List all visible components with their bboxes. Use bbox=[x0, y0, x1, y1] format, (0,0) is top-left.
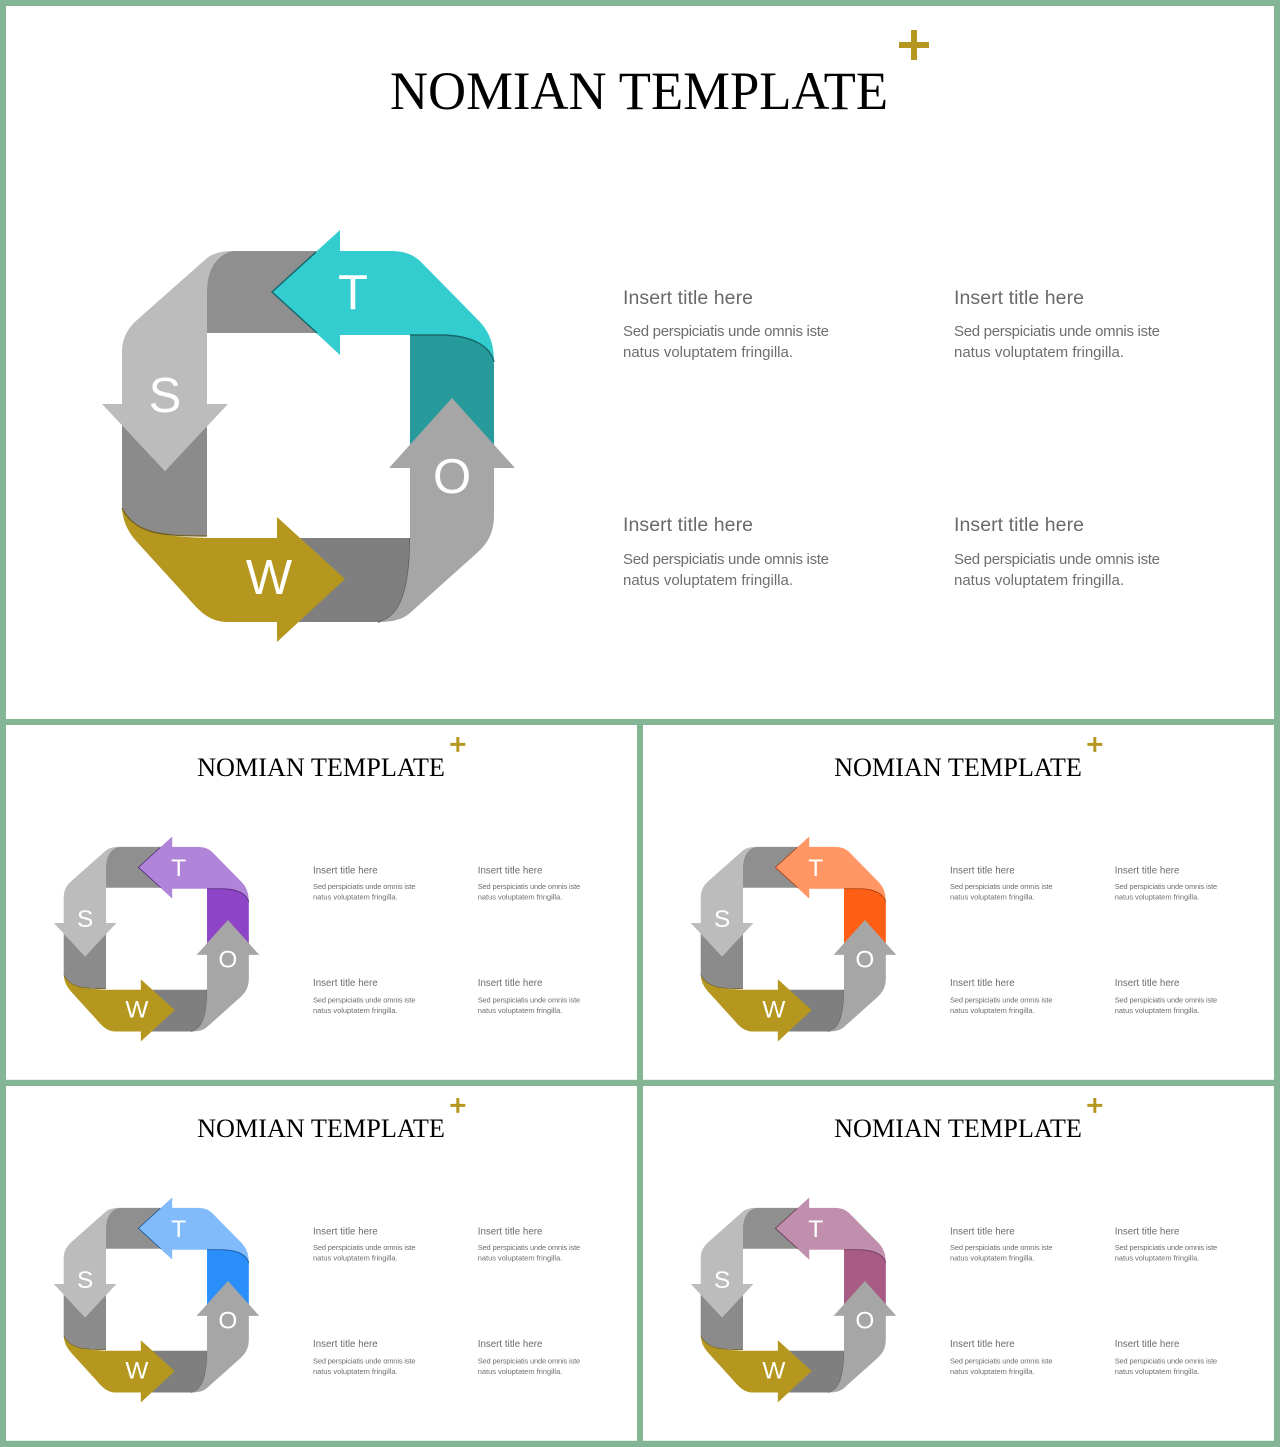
text block 3: natus voluptatem fringilla. bbox=[623, 572, 793, 589]
text block 4: natus voluptatem fringilla. bbox=[1115, 1006, 1199, 1015]
text block 2 bbox=[478, 1226, 580, 1263]
text block 1 bbox=[313, 865, 416, 902]
letter S: S bbox=[77, 906, 93, 933]
letter S: S bbox=[77, 1267, 93, 1294]
text block 4: natus voluptatem fringilla. bbox=[478, 1367, 562, 1376]
arrow: W bbox=[64, 1336, 175, 1402]
letter S: S bbox=[714, 906, 730, 933]
letter T: T bbox=[171, 1216, 186, 1243]
text block 2: Sed perspiciatis unde omnis iste bbox=[478, 882, 580, 891]
text block 4: Insert title here bbox=[954, 514, 1084, 536]
letter O: O bbox=[855, 946, 874, 973]
text block 1 bbox=[950, 865, 1053, 902]
diagram: SWOT cycle bbox=[54, 836, 259, 1041]
text block 2: Sed perspiciatis unde omnis iste bbox=[1115, 882, 1217, 891]
arrow: O bbox=[191, 920, 259, 1032]
letter T: T bbox=[808, 855, 823, 882]
letter O: O bbox=[218, 946, 237, 973]
text block 3: Insert title here bbox=[623, 514, 753, 536]
text block 2: Insert title here bbox=[478, 1226, 542, 1237]
text block 1 bbox=[950, 1226, 1053, 1263]
text block 1: Insert title here bbox=[623, 287, 753, 309]
text block 3: natus voluptatem fringilla. bbox=[313, 1006, 398, 1015]
letter S: S bbox=[149, 369, 181, 423]
title: NOMIAN TEMPLATE bbox=[834, 752, 1082, 782]
icon: gold plus bbox=[1087, 1098, 1102, 1113]
text block 4 bbox=[1115, 978, 1217, 1015]
text block 3: Insert title here bbox=[950, 1339, 1015, 1350]
text block 2: natus voluptatem fringilla. bbox=[1115, 1254, 1199, 1263]
letter O: O bbox=[433, 450, 471, 504]
title: NOMIAN TEMPLATE bbox=[197, 1113, 445, 1143]
text block 2 bbox=[1115, 865, 1217, 902]
text block 3 bbox=[313, 1339, 416, 1376]
text block 2: natus voluptatem fringilla. bbox=[1115, 893, 1199, 902]
text block 1: Insert title here bbox=[950, 865, 1015, 876]
text block 4 bbox=[1115, 1339, 1217, 1376]
letter W: W bbox=[246, 551, 293, 605]
arrow: S bbox=[102, 251, 233, 471]
panel: large SWOT teal bbox=[6, 6, 1274, 719]
letter T: T bbox=[171, 855, 186, 882]
letter O: O bbox=[218, 1307, 237, 1334]
letter S: S bbox=[714, 1267, 730, 1294]
text block 3: natus voluptatem fringilla. bbox=[950, 1006, 1035, 1015]
text block 4: Sed perspiciatis unde omnis iste bbox=[1115, 996, 1217, 1005]
text block 3: Sed perspiciatis unde omnis iste bbox=[313, 996, 416, 1005]
text block 2: Sed perspiciatis unde omnis iste bbox=[954, 323, 1160, 340]
letter W: W bbox=[125, 1358, 148, 1385]
arrow: W bbox=[701, 975, 812, 1041]
text block 2: natus voluptatem fringilla. bbox=[478, 1254, 562, 1263]
letter W: W bbox=[762, 1358, 785, 1385]
text block 4: natus voluptatem fringilla. bbox=[954, 572, 1124, 589]
text block 3: Insert title here bbox=[313, 978, 378, 989]
arrow: S bbox=[691, 847, 756, 956]
text block 1: Insert title here bbox=[313, 865, 378, 876]
text block 2 bbox=[478, 865, 580, 902]
text block 2: Insert title here bbox=[1115, 1226, 1179, 1237]
text block 3: natus voluptatem fringilla. bbox=[313, 1367, 398, 1376]
text block 2 bbox=[954, 287, 1160, 361]
arrow: T bbox=[775, 836, 886, 902]
arrow: T bbox=[272, 230, 494, 362]
text block 1: natus voluptatem fringilla. bbox=[950, 1254, 1035, 1263]
text block 4: Sed perspiciatis unde omnis iste bbox=[954, 551, 1160, 568]
text block 2: Insert title here bbox=[478, 865, 542, 876]
text block 3: Sed perspiciatis unde omnis iste bbox=[950, 1357, 1053, 1366]
arrow: O bbox=[828, 1281, 896, 1393]
text block 1: Sed perspiciatis unde omnis iste bbox=[623, 323, 829, 340]
arrow: S bbox=[54, 847, 119, 956]
text block 2: natus voluptatem fringilla. bbox=[954, 344, 1124, 361]
text block 4: natus voluptatem fringilla. bbox=[478, 1006, 562, 1015]
title: NOMIAN TEMPLATE bbox=[834, 1113, 1082, 1143]
letter T: T bbox=[808, 1216, 823, 1243]
text block 3 bbox=[950, 1339, 1053, 1376]
text block 4: natus voluptatem fringilla. bbox=[1115, 1367, 1199, 1376]
arrow: T bbox=[138, 1197, 249, 1263]
text block 1: Sed perspiciatis unde omnis iste bbox=[950, 1243, 1053, 1252]
text block 4: Sed perspiciatis unde omnis iste bbox=[478, 1357, 580, 1366]
panel: small SWOT purple bbox=[6, 725, 637, 1080]
text block 1 bbox=[623, 287, 829, 361]
letter O: O bbox=[855, 1307, 874, 1334]
text block 4: Insert title here bbox=[478, 978, 542, 989]
text block 1: natus voluptatem fringilla. bbox=[950, 893, 1035, 902]
diagram: SWOT cycle bbox=[691, 836, 896, 1041]
text block 4: Insert title here bbox=[1115, 1339, 1179, 1350]
text block 2: Sed perspiciatis unde omnis iste bbox=[478, 1243, 580, 1252]
text block 1: Insert title here bbox=[313, 1226, 378, 1237]
diagram: SWOT cycle bbox=[691, 1197, 896, 1402]
arrow: T bbox=[138, 836, 249, 902]
arrow: S bbox=[691, 1208, 756, 1317]
arrow: W bbox=[122, 508, 345, 642]
text block 3: Sed perspiciatis unde omnis iste bbox=[313, 1357, 416, 1366]
icon: gold plus bbox=[450, 1098, 465, 1113]
arrow: O bbox=[191, 1281, 259, 1393]
text block 1: Sed perspiciatis unde omnis iste bbox=[950, 882, 1053, 891]
text block 4 bbox=[478, 978, 580, 1015]
letter T: T bbox=[338, 266, 368, 320]
title: NOMIAN TEMPLATE bbox=[197, 752, 445, 782]
text block 4 bbox=[478, 1339, 580, 1376]
text block 3: natus voluptatem fringilla. bbox=[950, 1367, 1035, 1376]
panel: small SWOT mauve bbox=[643, 1086, 1274, 1441]
text block 2: Insert title here bbox=[954, 287, 1084, 309]
arrow: T bbox=[775, 1197, 886, 1263]
text block 3 bbox=[623, 514, 829, 589]
text block 1: Sed perspiciatis unde omnis iste bbox=[313, 882, 416, 891]
text block 4: Sed perspiciatis unde omnis iste bbox=[1115, 1357, 1217, 1366]
diagram: SWOT cycle bbox=[102, 230, 515, 642]
text block 2: Insert title here bbox=[1115, 865, 1179, 876]
diagram: SWOT cycle bbox=[54, 1197, 259, 1402]
text block 3: Insert title here bbox=[313, 1339, 378, 1350]
text block 4: Insert title here bbox=[478, 1339, 542, 1350]
text block 3: Sed perspiciatis unde omnis iste bbox=[623, 551, 829, 568]
text block 2: Sed perspiciatis unde omnis iste bbox=[1115, 1243, 1217, 1252]
panel: small SWOT blue bbox=[6, 1086, 637, 1441]
text block 4: Insert title here bbox=[1115, 978, 1179, 989]
text block 2 bbox=[1115, 1226, 1217, 1263]
text block 3 bbox=[950, 978, 1053, 1015]
arrow: W bbox=[64, 975, 175, 1041]
panel: small SWOT orange bbox=[643, 725, 1274, 1080]
arrow: W bbox=[701, 1336, 812, 1402]
icon: gold plus bbox=[1087, 737, 1102, 752]
text block 1: natus voluptatem fringilla. bbox=[623, 344, 793, 361]
text block 2: natus voluptatem fringilla. bbox=[478, 893, 562, 902]
icon: gold plus bbox=[450, 737, 465, 752]
text block 3 bbox=[313, 978, 416, 1015]
text block 1: Insert title here bbox=[950, 1226, 1015, 1237]
text block 3: Insert title here bbox=[950, 978, 1015, 989]
text block 1: natus voluptatem fringilla. bbox=[313, 1254, 398, 1263]
title: NOMIAN TEMPLATE bbox=[390, 61, 888, 121]
icon: gold plus bbox=[899, 30, 929, 60]
letter W: W bbox=[125, 997, 148, 1024]
text block 3: Sed perspiciatis unde omnis iste bbox=[950, 996, 1053, 1005]
text block 4: Sed perspiciatis unde omnis iste bbox=[478, 996, 580, 1005]
text block 1: Sed perspiciatis unde omnis iste bbox=[313, 1243, 416, 1252]
text block 1: natus voluptatem fringilla. bbox=[313, 893, 398, 902]
arrow: O bbox=[378, 398, 515, 622]
text block 1 bbox=[313, 1226, 416, 1263]
letter W: W bbox=[762, 997, 785, 1024]
arrow: O bbox=[828, 920, 896, 1032]
arrow: S bbox=[54, 1208, 119, 1317]
text block 4 bbox=[954, 514, 1160, 589]
